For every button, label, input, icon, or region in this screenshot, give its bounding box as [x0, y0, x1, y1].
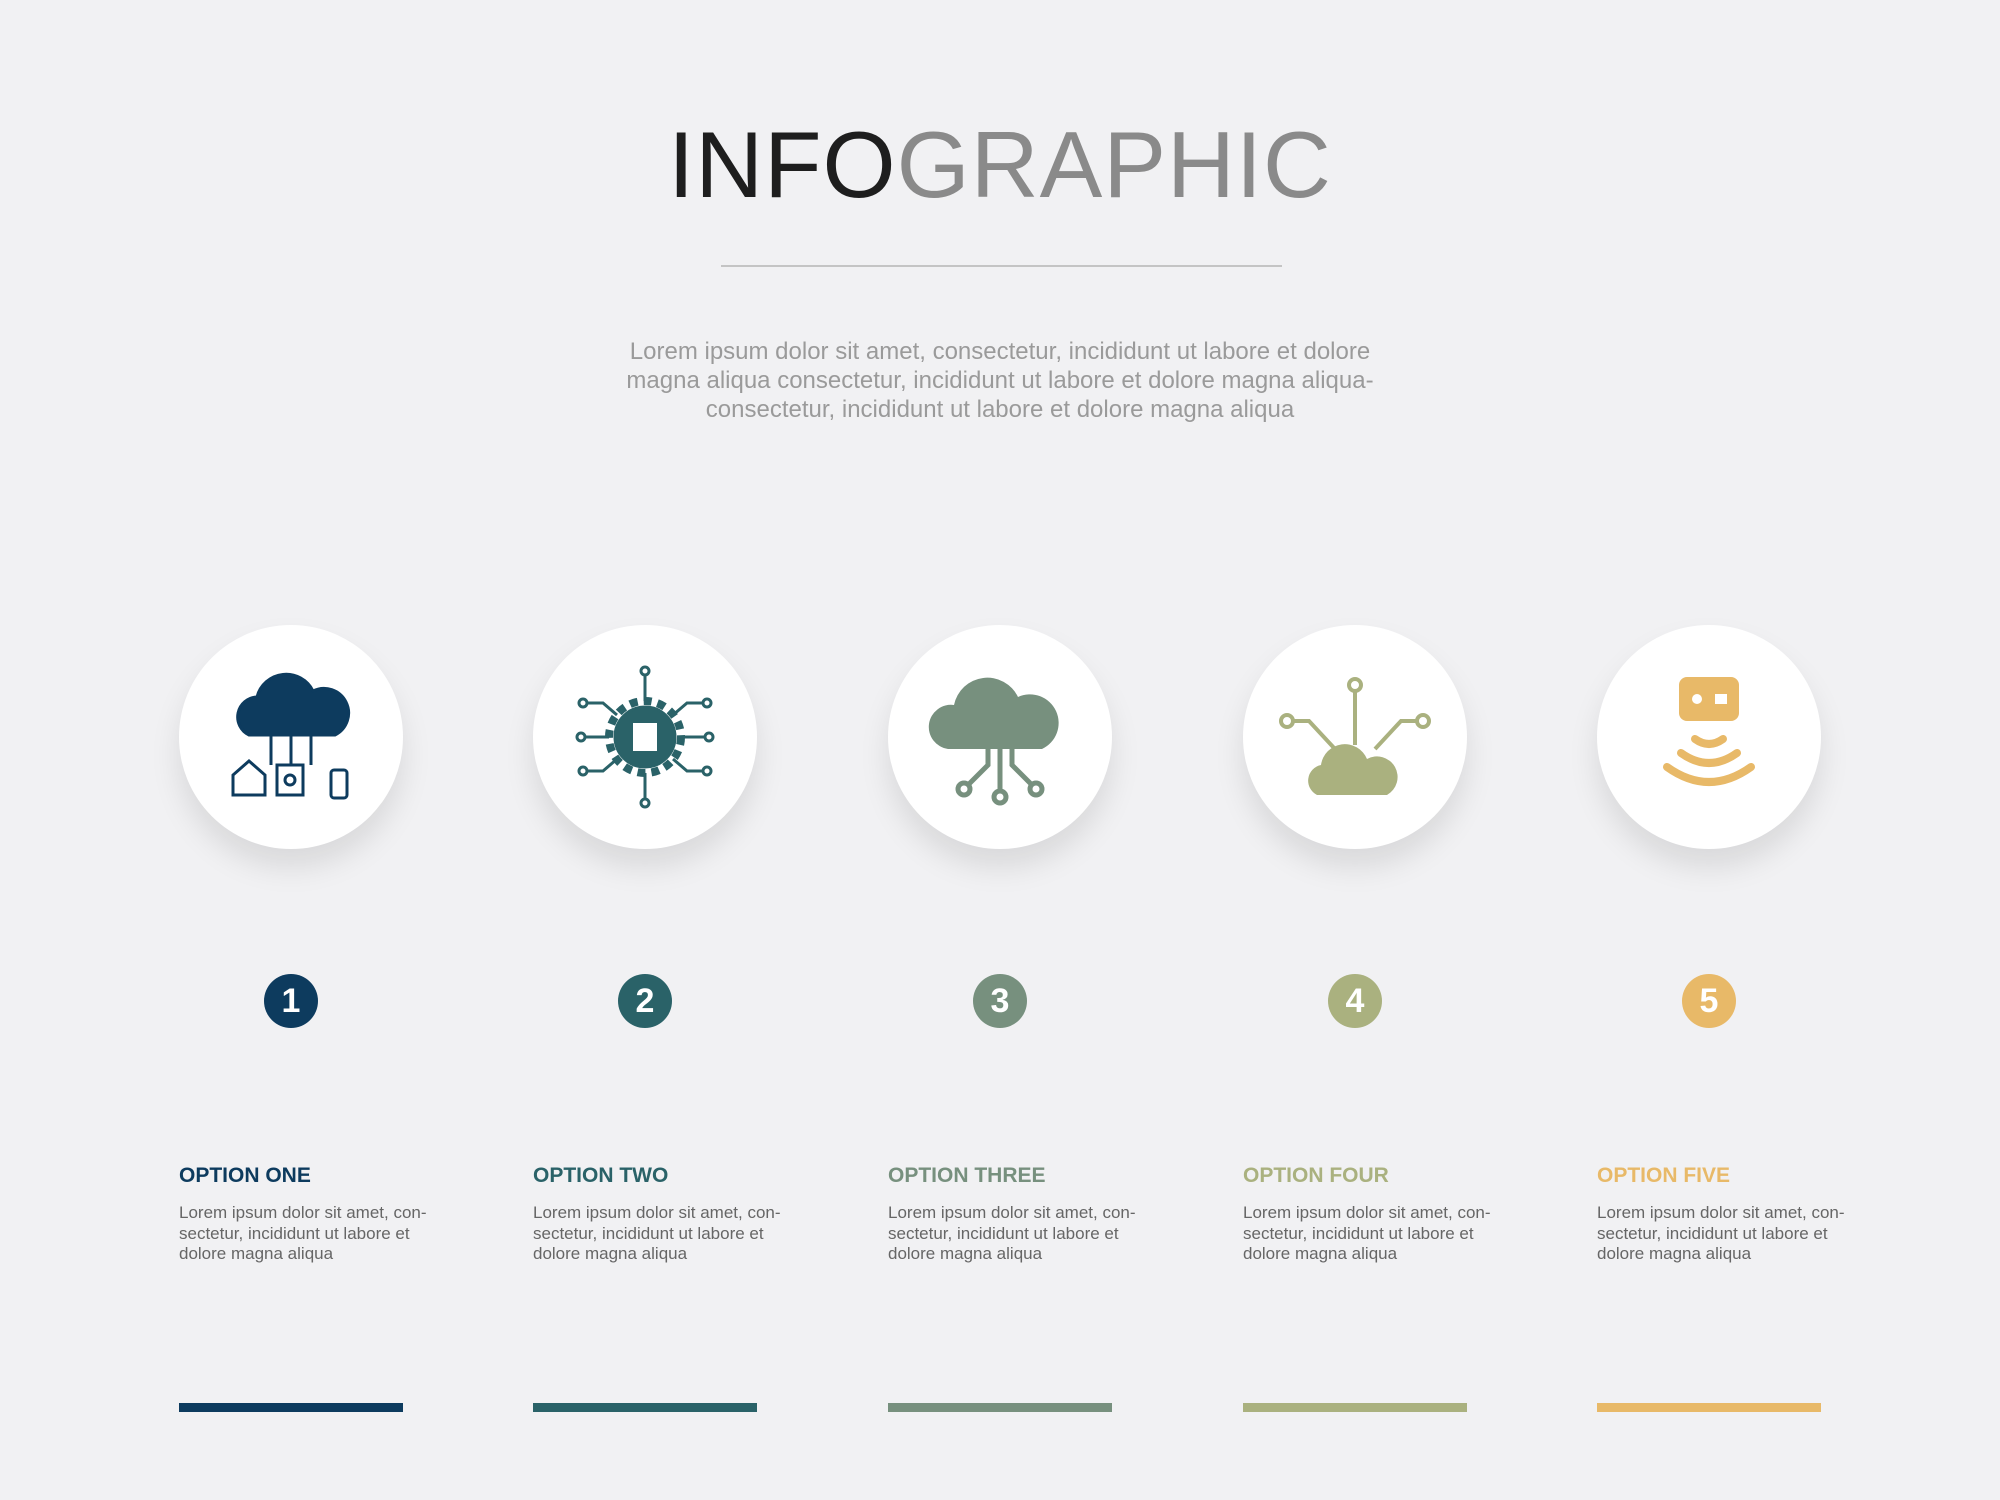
bar 1 — [179, 1403, 403, 1412]
option two text: sectetur, incididunt ut labore et — [533, 1224, 764, 1242]
option four text: Lorem ipsum dolor sit amet, con- — [1243, 1203, 1491, 1222]
option five text — [1597, 1164, 1845, 1263]
option two text: Lorem ipsum dolor sit amet, con- — [533, 1203, 781, 1222]
number badge 4: 4 — [1346, 982, 1364, 1020]
number badge 2: 2 — [636, 982, 654, 1020]
subtitle text: magna aliqua consectetur, incididunt ut labore et dolore magna aliqua- — [626, 367, 1374, 394]
option one text: sectetur, incididunt ut labore et — [179, 1224, 410, 1242]
icon circle 4: cloud network — [1243, 625, 1467, 849]
subtitle text: consectetur, incididunt ut labore et dolore magna aliqua — [706, 396, 1294, 423]
option five text: Lorem ipsum dolor sit amet, con- — [1597, 1203, 1845, 1222]
option three text: OPTION THREE — [888, 1164, 1046, 1187]
number badge 3: 3 — [991, 982, 1009, 1020]
icon circle 1: cloud with devices — [179, 625, 403, 849]
option four text: sectetur, incididunt ut labore et — [1243, 1224, 1474, 1242]
number badge 2 — [618, 974, 672, 1028]
option one text: OPTION ONE — [179, 1164, 311, 1187]
option five text: dolore magna aliqua — [1597, 1244, 1751, 1263]
option one text: Lorem ipsum dolor sit amet, con- — [179, 1203, 427, 1222]
title: INFOGRAPHIC — [668, 112, 1332, 217]
bar 2 — [533, 1403, 757, 1412]
option one text: dolore magna aliqua — [179, 1244, 333, 1263]
number badge 1 — [264, 974, 318, 1028]
option three text — [888, 1164, 1136, 1263]
option one text — [179, 1164, 427, 1263]
option four text — [1243, 1164, 1491, 1263]
option five text: OPTION FIVE — [1597, 1164, 1730, 1187]
option two text: OPTION TWO — [533, 1164, 668, 1187]
icon circle 3: cloud circuit — [888, 625, 1112, 849]
bar 3 — [888, 1403, 1112, 1412]
option four text: OPTION FOUR — [1243, 1164, 1389, 1187]
subtitle text: Lorem ipsum dolor sit amet, consectetur, incididunt ut labore et dolore — [630, 338, 1370, 365]
number badge 5 — [1682, 974, 1736, 1028]
number badge 4 — [1328, 974, 1382, 1028]
option five text: sectetur, incididunt ut labore et — [1597, 1224, 1828, 1242]
bar 4 — [1243, 1403, 1467, 1412]
number badge 3 — [973, 974, 1027, 1028]
option three text: Lorem ipsum dolor sit amet, con- — [888, 1203, 1136, 1222]
option two text — [533, 1164, 781, 1263]
icon circle 2: gear network — [533, 625, 757, 849]
number badge 5: 5 — [1700, 982, 1718, 1020]
icon circle 5: sensor waves — [1597, 625, 1821, 849]
option two text: dolore magna aliqua — [533, 1244, 687, 1263]
number badge 1: 1 — [282, 982, 300, 1020]
bar 5 — [1597, 1403, 1821, 1412]
option four text: dolore magna aliqua — [1243, 1244, 1397, 1263]
option three text: dolore magna aliqua — [888, 1244, 1042, 1263]
subtitle text — [626, 338, 1374, 423]
option three text: sectetur, incididunt ut labore et — [888, 1224, 1119, 1242]
